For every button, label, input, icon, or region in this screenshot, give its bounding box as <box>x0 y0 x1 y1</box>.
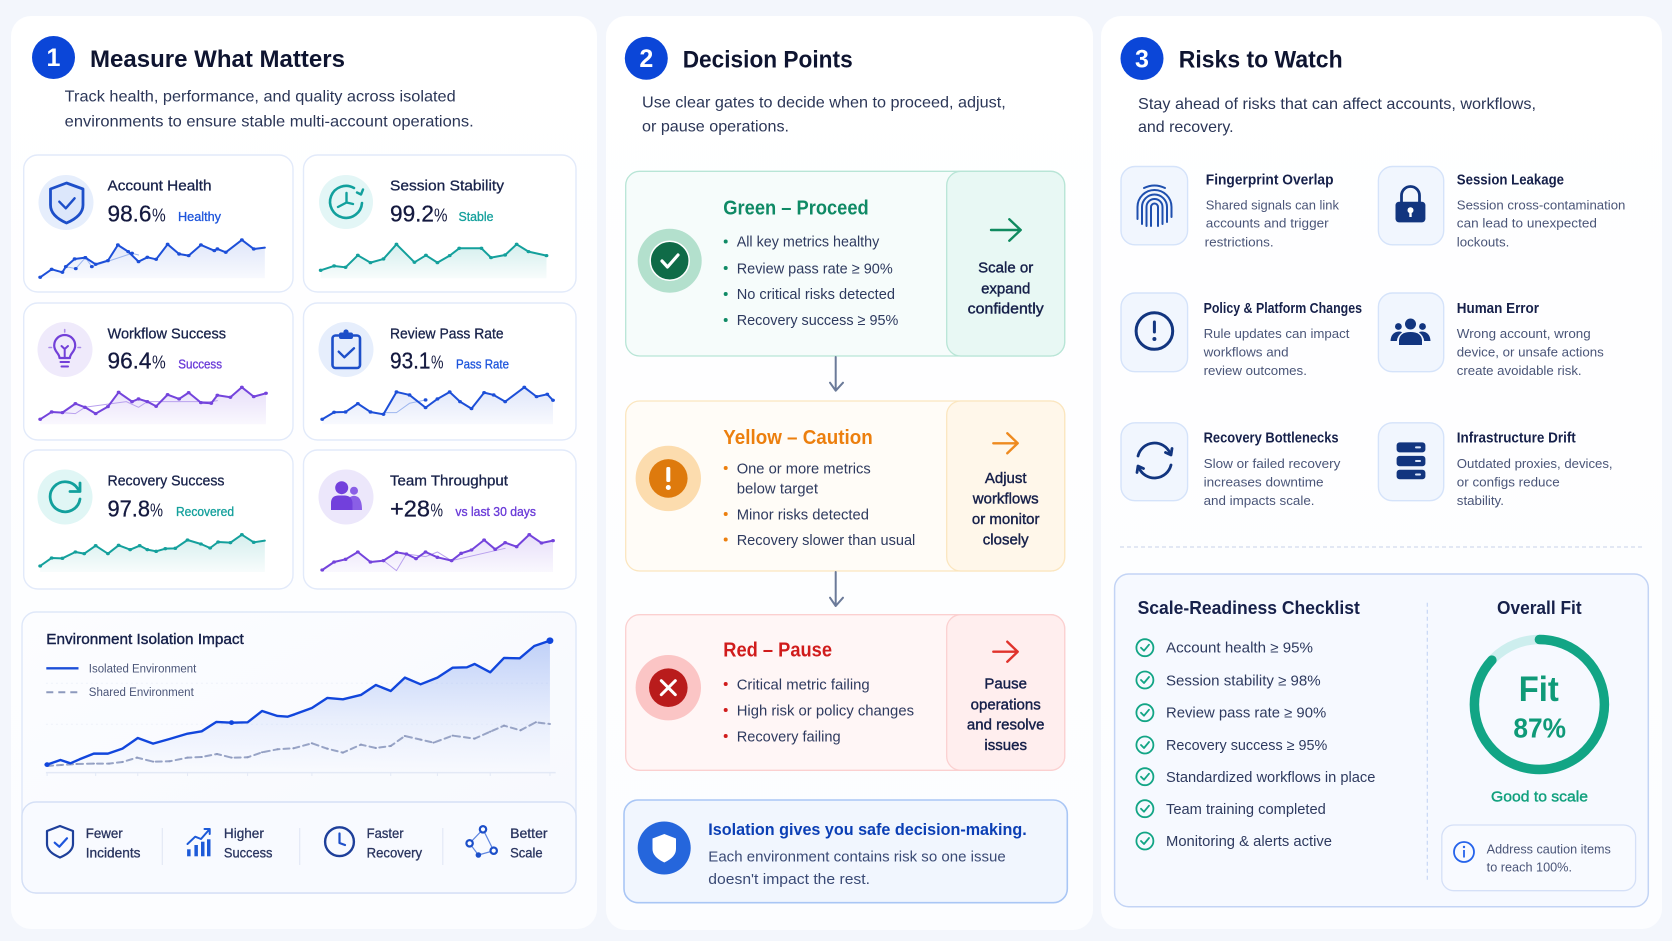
yellow gate title: Yellow – Caution <box>723 427 873 449</box>
section 2 heading: 2 <box>639 45 653 73</box>
fit gauge: 87% <box>1513 712 1566 743</box>
green action text: expand <box>981 280 1030 297</box>
chart legend: Isolated Environment <box>89 663 197 675</box>
callout body: Each environment contains risk so one issue <box>708 849 1006 866</box>
gate: red pause <box>626 615 1065 770</box>
note box: to reach 100%. <box>1487 861 1572 875</box>
yellow action text <box>972 470 1039 548</box>
section 3 heading: Risks to Watch <box>1179 47 1343 74</box>
checklist items <box>1136 639 1375 850</box>
icon: server stack <box>1397 442 1425 479</box>
section 3 heading <box>1120 37 1343 80</box>
metric card: workflow success: Success <box>178 358 222 372</box>
red gate criteria: High risk or policy changes <box>737 702 914 719</box>
metric card: session stability: % <box>434 206 448 226</box>
metric card: recovery success: 97.8 <box>108 496 150 522</box>
benefit: faster recovery <box>367 825 422 861</box>
metric card: session stability: 99.2 <box>390 201 434 227</box>
checklist items: Session stability ≥ 98% <box>1166 673 1321 689</box>
benefit: higher success: Success <box>224 845 272 861</box>
risk: fingerprint overlap: Fingerprint Overlap <box>1206 172 1334 188</box>
callout body: doesn't impact the rest. <box>708 871 870 888</box>
icon: padlock <box>1396 187 1425 222</box>
benefit: faster recovery: Faster <box>367 825 404 841</box>
risk: human error: Wrong account, wrong <box>1457 326 1591 341</box>
metric card: team throughput: Team Throughput <box>390 473 509 490</box>
risk: recovery bottlenecks: Recovery Bottlenecks <box>1204 430 1339 446</box>
arrow: yellow to red <box>830 572 843 606</box>
metric card: review pass rate: % <box>431 353 444 373</box>
metric card: recovery success: Recovered <box>176 505 234 519</box>
arrow: green action <box>991 219 1021 241</box>
panel: risks to watch <box>1101 16 1662 929</box>
fit gauge <box>1474 640 1604 770</box>
checklist items: Recovery success ≥ 95% <box>1166 738 1327 754</box>
risk: infrastructure drift: Outdated proxies, devices, <box>1457 456 1613 471</box>
metric card: workflow success: % <box>152 353 166 373</box>
green gate criteria: Review pass rate ≥ 90% <box>737 260 893 277</box>
risk: fingerprint overlap: Shared signals can link <box>1206 197 1339 212</box>
metric card: team throughput <box>304 450 576 589</box>
section 1 heading: 1 <box>47 44 61 72</box>
red gate criteria: Recovery failing <box>737 728 841 745</box>
overall fit heading: Overall Fit <box>1497 598 1582 618</box>
chart legend <box>46 663 197 699</box>
metric card: session stability: Stable <box>458 210 494 224</box>
yellow action text: workflows <box>972 490 1039 507</box>
gate: green proceed <box>626 171 1065 356</box>
section 3 description: Stay ahead of risks that can affect accounts, workflows, <box>1138 96 1536 113</box>
section 2 description <box>642 94 1006 136</box>
risk: recovery bottlenecks: and impacts scale. <box>1204 493 1314 508</box>
metric card: review pass rate: Review Pass Rate <box>390 325 504 342</box>
environment isolation impact chart <box>22 612 576 893</box>
icon: exclamation circle <box>1136 313 1173 349</box>
callout: isolation <box>624 800 1067 903</box>
section 1 heading <box>32 36 345 79</box>
section 1 description: environments to ensure stable multi-account operations. <box>65 114 474 131</box>
icon: green check badge <box>638 229 702 293</box>
benefit: faster recovery: Recovery <box>367 845 422 861</box>
yellow gate criteria <box>724 460 915 549</box>
line chart: isolated vs shared <box>44 637 556 776</box>
callout body <box>708 849 1006 888</box>
metric card: recovery success: Recovery Success <box>108 473 224 490</box>
section 2 description: Use clear gates to decide when to proceed, adjust, <box>642 94 1006 112</box>
red action text <box>967 675 1044 754</box>
metric card: review pass rate: Pass Rate <box>456 358 509 372</box>
icon: callout shield <box>638 822 691 874</box>
metric card: account health: % <box>152 206 166 226</box>
risk: fingerprint overlap: accounts and trigger <box>1206 216 1329 231</box>
icon: better scale network <box>466 826 497 858</box>
section 2 description: or pause operations. <box>642 119 789 136</box>
risk: policy and platform changes <box>1121 293 1362 378</box>
metric card: account health <box>24 155 293 292</box>
red action text: operations <box>971 696 1041 713</box>
yellow action text: Adjust <box>985 470 1027 487</box>
arrow: yellow action <box>993 433 1018 453</box>
scale-readiness checklist card <box>1115 574 1648 907</box>
metric card: review pass rate: 93.1 <box>390 348 430 374</box>
icon: sync arrows <box>1137 443 1172 478</box>
red gate criteria <box>724 676 914 745</box>
metric card: account health: 98.6 <box>108 201 152 227</box>
checklist items: Review pass rate ≥ 90% <box>1166 706 1326 722</box>
note box: Address caution items <box>1487 842 1611 856</box>
icon: yellow warning badge <box>636 446 701 511</box>
green action text <box>968 260 1044 317</box>
risk: human error <box>1378 293 1604 378</box>
icon: faster recovery clock <box>325 827 354 856</box>
risk: session leakage: can lead to unexpected <box>1457 216 1597 231</box>
risk: session leakage: Session cross-contamination <box>1457 197 1625 212</box>
green action text: confidently <box>968 300 1044 317</box>
green gate criteria <box>724 234 898 329</box>
risk: recovery bottlenecks: increases downtime <box>1204 475 1324 490</box>
yellow action text: closely <box>983 531 1029 548</box>
risk: policy and platform changes: workflows and <box>1203 345 1289 360</box>
yellow gate criteria: Minor risks detected <box>737 506 869 523</box>
callout headline: Isolation gives you safe decision-making. <box>708 820 1027 839</box>
section 2 heading: Decision Points <box>683 47 853 74</box>
risk: infrastructure drift <box>1378 423 1613 508</box>
section 3 description <box>1138 96 1536 136</box>
yellow action text: or monitor <box>972 511 1039 528</box>
metric card: account health: Healthy <box>178 210 222 224</box>
metric card: review pass rate <box>304 303 576 440</box>
metric card: workflow success: 96.4 <box>108 348 152 374</box>
panel: decision points <box>606 16 1093 930</box>
green gate title: Green – Proceed <box>723 197 869 219</box>
benefit: better scale <box>510 825 548 861</box>
icon: higher success bars <box>187 829 210 856</box>
chart title: Environment Isolation Impact <box>46 631 245 648</box>
section 1 description <box>65 89 474 131</box>
risk: human error: Human Error <box>1457 301 1539 317</box>
checklist items: Account health ≥ 95% <box>1166 641 1313 657</box>
metric card: team throughput: vs last 30 days <box>455 505 536 519</box>
arrow: red action <box>993 642 1018 662</box>
icon: team <box>1390 318 1430 345</box>
icon: fingerprint <box>1138 186 1172 226</box>
risk: session leakage <box>1378 166 1625 250</box>
chart legend: Shared Environment <box>89 687 195 699</box>
checklist items: Standardized workflows in place <box>1166 770 1375 786</box>
green gate criteria: All key metrics healthy <box>737 234 880 251</box>
yellow gate criteria: One or more metrics <box>737 460 871 477</box>
yellow gate criteria: Recovery slower than usual <box>737 532 915 549</box>
metric card: workflow success <box>24 303 293 440</box>
checklist items: Monitoring & alerts active <box>1166 834 1332 850</box>
panel: measure what matters <box>11 16 597 929</box>
risk: human error: device, or unsafe actions <box>1457 345 1604 360</box>
risk: infrastructure drift: Infrastructure Drift <box>1457 430 1576 446</box>
arrow: green to yellow <box>830 357 843 391</box>
benefit: better scale: Better <box>510 825 548 841</box>
risk: policy and platform changes: Policy & Platform Changes <box>1204 301 1362 317</box>
benefit: fewer incidents <box>86 825 140 861</box>
metric card: recovery success: % <box>150 501 163 521</box>
note box <box>1442 825 1636 891</box>
checklist heading: Scale-Readiness Checklist <box>1138 598 1360 618</box>
yellow gate criteria: below target <box>737 480 819 497</box>
red action text: issues <box>984 737 1027 754</box>
red action text: and resolve <box>967 717 1044 734</box>
good to scale label: Good to scale <box>1491 789 1588 806</box>
red gate title: Red – Pause <box>723 640 832 662</box>
metric card: workflow success: Workflow Success <box>108 325 226 342</box>
metric card: recovery success <box>24 450 293 589</box>
section 3 heading: 3 <box>1135 46 1149 74</box>
metric card: session stability <box>304 155 576 292</box>
risk: fingerprint overlap <box>1121 166 1339 250</box>
benefit: fewer incidents: Incidents <box>86 845 140 861</box>
section 1 description: Track health, performance, and quality across isolated <box>65 89 456 106</box>
benefit: fewer incidents: Fewer <box>86 825 123 841</box>
checklist items: Team training completed <box>1166 802 1326 818</box>
green action text: Scale or <box>978 260 1033 277</box>
section 2 heading <box>625 37 853 80</box>
metric card: team throughput: +28 <box>390 496 430 522</box>
risk: human error: create avoidable risk. <box>1457 363 1582 378</box>
metric card: session stability: Session Stability <box>390 178 505 195</box>
risk: fingerprint overlap: restrictions. <box>1205 234 1274 250</box>
benefit: higher success: Higher <box>224 825 264 841</box>
risk: recovery bottlenecks: Slow or failed recovery <box>1204 456 1341 471</box>
icon: red stop badge <box>636 655 701 720</box>
green gate criteria: Recovery success ≥ 95% <box>737 312 898 329</box>
green gate criteria: No critical risks detected <box>737 286 895 303</box>
benefits strip <box>22 802 576 893</box>
risk: session leakage: Session Leakage <box>1457 172 1564 188</box>
red action text: Pause <box>984 675 1027 692</box>
section 1 heading: Measure What Matters <box>90 46 345 73</box>
metric card: account health: Account Health <box>108 178 212 195</box>
risk: infrastructure drift: or configs reduce <box>1457 475 1560 490</box>
risk: policy and platform changes: review outcomes. <box>1204 363 1307 378</box>
risk: recovery bottlenecks <box>1121 423 1341 508</box>
gate: yellow caution <box>626 401 1065 571</box>
section 3 description: and recovery. <box>1138 119 1234 136</box>
icon: fewer incidents shield <box>47 826 73 858</box>
fit gauge: Fit <box>1519 670 1559 709</box>
icon: info <box>1454 842 1474 862</box>
metric card: team throughput: % <box>430 501 443 521</box>
benefit: higher success <box>224 825 272 861</box>
risk: session leakage: lockouts. <box>1457 234 1509 250</box>
risk: policy and platform changes: Rule updates can impact <box>1204 326 1350 341</box>
red gate criteria: Critical metric failing <box>737 676 870 693</box>
benefit: better scale: Scale <box>510 845 543 861</box>
risk: infrastructure drift: stability. <box>1457 493 1504 508</box>
